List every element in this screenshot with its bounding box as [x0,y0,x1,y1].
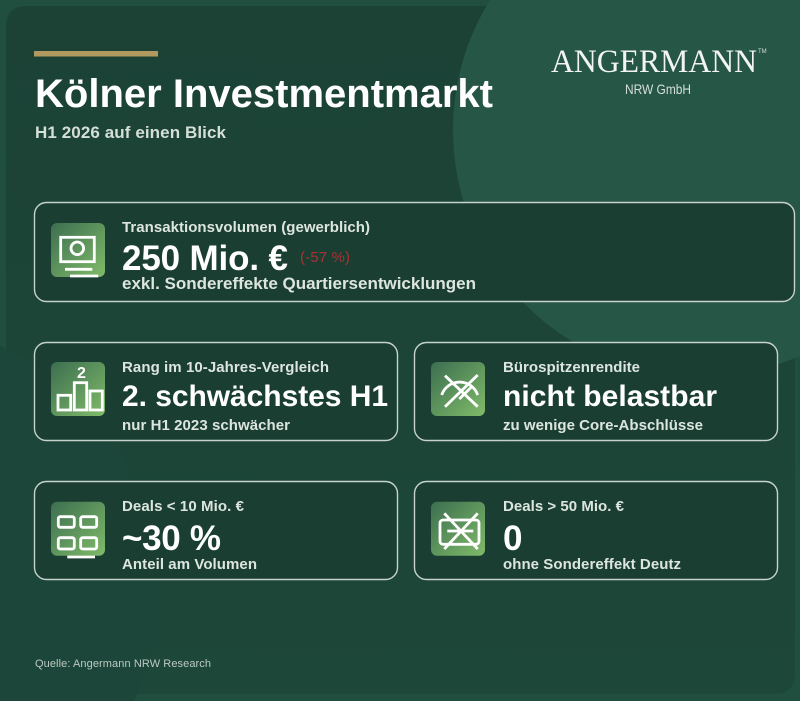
note: ohne Sondereffekt Deutz [503,556,681,573]
label: Rang im 10-Jahres-Vergleich [122,359,329,376]
panel: Rang [34,342,398,440]
panel: Deals über 50 Mio [414,482,778,580]
accent bar [34,51,158,56]
note: zu wenige Core-Abschlüsse [503,417,703,434]
value: 250 Mio. € [122,239,288,278]
panel: Transaktionsvolumen [34,202,794,302]
logo: NRW GmbH [625,81,691,97]
logo: TM [758,49,767,55]
panel: Bürospitzenrendite [414,342,778,440]
icon: podium [51,362,105,416]
source: Quelle: Angermann NRW Research [35,658,211,670]
label: Bürospitzenrendite [503,359,640,376]
panel: Deals unter 10 Mio [34,482,398,580]
value: nicht belastbar [503,380,717,413]
icon: crossed box [431,502,485,556]
value: ~30 % [122,519,221,558]
label: Deals < 10 Mio. € [122,498,245,515]
title: Kölner Investmentmarkt [35,72,493,116]
value: 0 [503,519,522,558]
note: nur H1 2023 schwächer [122,417,290,434]
value: 2. schwächstes H1 [122,380,388,413]
icon: banknote monitor [51,223,105,277]
label: Transaktionsvolumen (gewerblich) [122,219,370,236]
change: (-57 %) [300,249,350,266]
icon: four tiles [51,502,105,557]
logo: ANGERMANN [551,44,757,80]
subtitle: H1 2026 auf einen Blick [35,123,227,142]
logo [551,44,767,97]
note: Anteil am Volumen [122,556,257,573]
label: Deals > 50 Mio. € [503,498,625,515]
icon: crossed gauge [431,362,485,416]
icon: podium: 2 [77,365,86,382]
note: exkl. Sondereffekte Quartiersentwicklungen [122,274,476,293]
